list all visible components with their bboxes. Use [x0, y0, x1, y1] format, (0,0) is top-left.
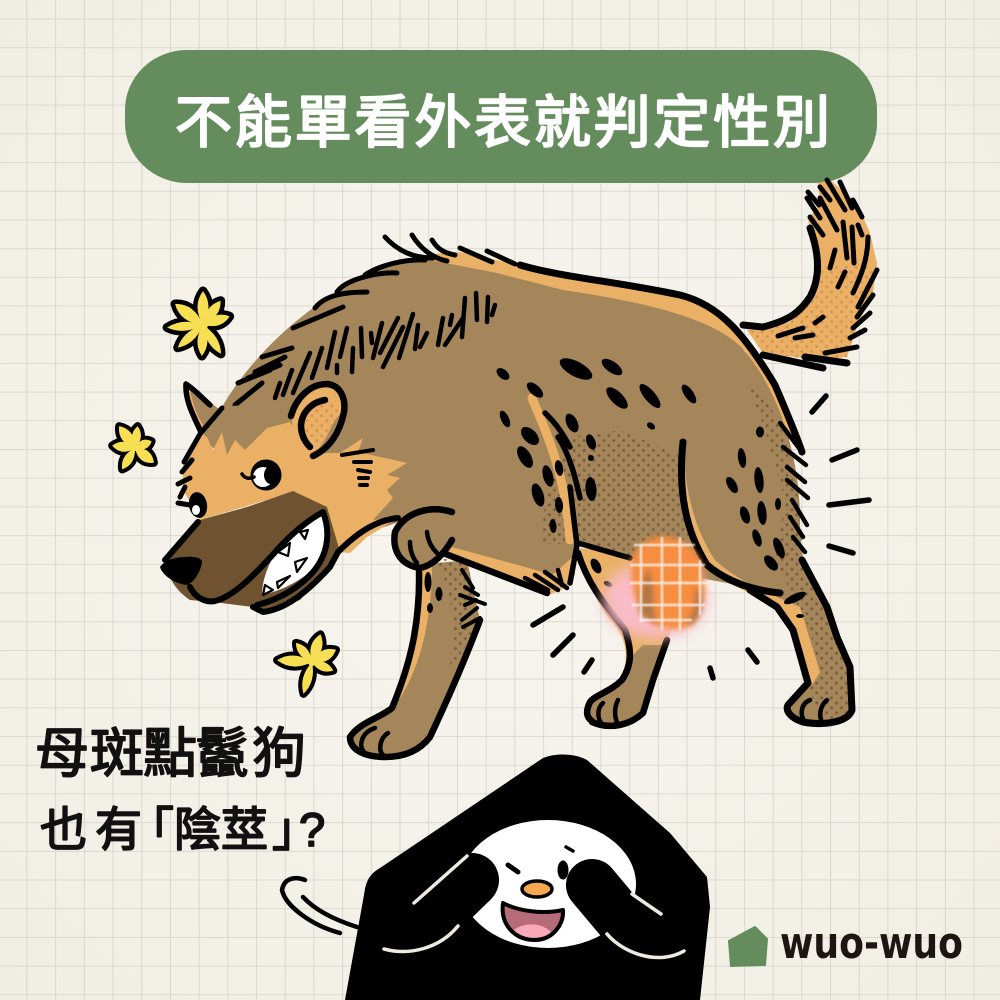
muzzle: [165, 491, 340, 612]
beak: [522, 881, 552, 897]
logo: wuo-wuo: [780, 918, 963, 969]
arm highlights: [384, 856, 684, 957]
brown forehead and neck: [203, 400, 420, 535]
icon: yellow flower middle: [112, 423, 157, 472]
outlines: [520, 265, 852, 724]
caption text: 母斑點鬣狗: [35, 724, 306, 784]
white face: [460, 820, 636, 948]
front paw: [394, 509, 452, 568]
paw toes on rear leg: [802, 700, 827, 724]
title banner: 不能單看外表就判定性別: [175, 91, 830, 155]
near ear: [291, 384, 344, 456]
censor mosaic: [603, 537, 708, 638]
title banner: [125, 50, 877, 183]
head: [160, 384, 420, 612]
eye far: [187, 491, 209, 519]
back fur hairs: [235, 235, 515, 405]
icon: green house: [729, 927, 767, 966]
nose: [160, 557, 202, 585]
orange back strip: [430, 252, 803, 450]
body: [200, 235, 852, 724]
icon: yellow flower bottom: [277, 633, 339, 695]
eye left: [508, 865, 518, 872]
far ear: [186, 384, 220, 432]
cheek marks: [342, 450, 373, 485]
open mouth: [503, 903, 563, 940]
penguin character: [282, 754, 710, 1000]
rear leg fur hairs: [780, 423, 808, 552]
left hand: [400, 880, 472, 950]
far rear leg: [578, 548, 690, 726]
eye near: [242, 460, 282, 490]
caption text: [35, 724, 325, 856]
motion lines around hyena: [533, 396, 869, 678]
eye right: [558, 847, 573, 880]
speech swoosh: [282, 878, 357, 933]
tail: [743, 180, 877, 368]
front leg: [350, 558, 485, 757]
muzzle and jaw outlines: [165, 512, 398, 612]
orange edges: [680, 445, 820, 685]
mouth: [262, 513, 327, 595]
right hand: [592, 885, 655, 960]
black hooded body: [345, 754, 710, 1000]
teeth: [263, 530, 308, 595]
hyena illustration: [160, 180, 877, 757]
caption text: 也有「陰莖」?: [40, 803, 325, 856]
logo: [729, 918, 963, 969]
icon: yellow flower top: [167, 291, 231, 356]
head outline hairs: [178, 408, 222, 505]
body spots: [494, 354, 808, 618]
